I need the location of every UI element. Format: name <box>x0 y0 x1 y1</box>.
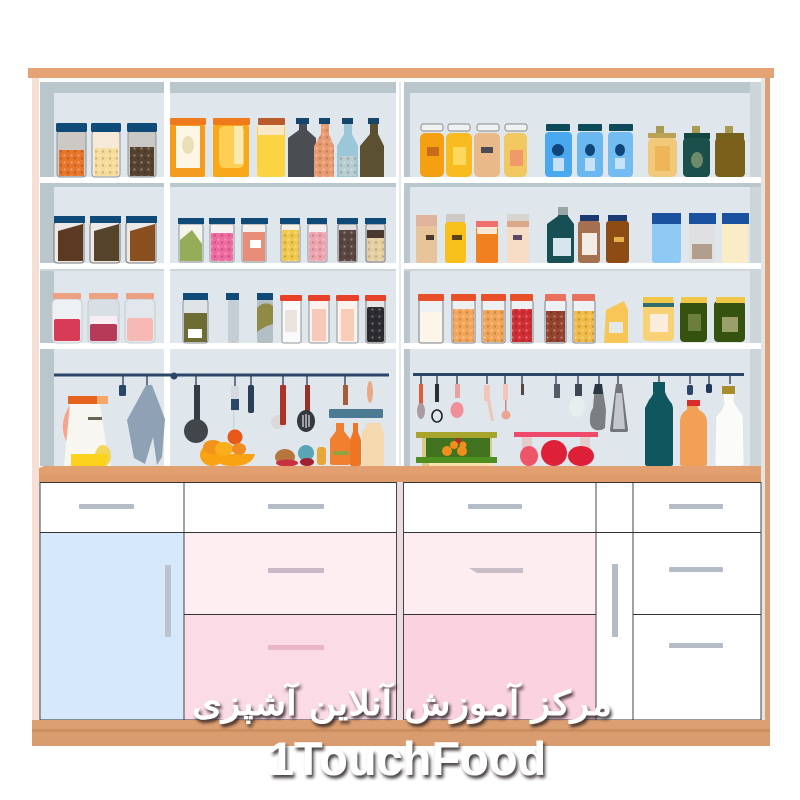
icon: pink whisk <box>450 384 464 418</box>
icon: peach tool <box>484 385 494 421</box>
white bottle <box>715 386 744 466</box>
food pile <box>275 445 326 466</box>
drawer: top centre right <box>404 482 596 532</box>
icon: dark spatula <box>248 385 254 413</box>
jars: shelf 3 left <box>52 293 386 343</box>
right hanging rail with utensils <box>413 373 744 432</box>
jars: shelf 2 left <box>54 216 386 263</box>
oranges <box>200 430 255 466</box>
jug <box>63 396 111 467</box>
cabinet frame <box>32 76 770 727</box>
jars: shelf 3 right <box>418 294 745 343</box>
title: brand: 1TouchFood <box>268 732 546 785</box>
icon: small spoon <box>417 384 425 419</box>
icon: peach spoon <box>502 384 510 420</box>
orange bottle <box>680 400 707 466</box>
base plinth <box>32 720 770 746</box>
title: Persian: مرکز آموزش آنلاین آشپزی <box>192 683 612 724</box>
jars: shelf 2 right <box>416 207 749 263</box>
panel: upper left compartment <box>40 82 164 466</box>
icon: wide spatula <box>610 384 628 432</box>
icon: ladle <box>184 385 208 443</box>
icon: spatula grey <box>590 384 606 430</box>
drawer: top left <box>40 482 184 532</box>
top board <box>28 68 774 78</box>
panel: upper right compartment <box>404 82 761 466</box>
jars: shelf 1 right <box>420 124 745 177</box>
countertop <box>39 466 761 482</box>
panel: upper middle compartment <box>170 82 396 466</box>
icon: skimmer <box>297 385 315 432</box>
icon: cleaver <box>554 384 560 398</box>
jars: shelf 1 left <box>56 118 384 177</box>
icon: red spoon <box>271 385 286 429</box>
small shelf with bottles <box>329 409 384 466</box>
icon: hanging towel <box>127 385 165 465</box>
icon: whisk <box>231 386 239 431</box>
icon: pot holder <box>119 385 126 396</box>
drawer: top middle <box>184 482 396 532</box>
icon: small utensil <box>343 385 348 405</box>
red tray with apples <box>514 432 598 466</box>
door: blue <box>40 532 184 720</box>
icon: round ladle <box>432 384 442 422</box>
drawer: light pink left <box>184 532 396 614</box>
teal bottle <box>645 382 673 466</box>
drawers: right stack <box>633 482 761 720</box>
icon: cleaver 2 <box>569 384 585 417</box>
drawer: pink left <box>184 614 396 720</box>
drawer: light pink right <box>404 532 596 614</box>
shelves <box>40 82 761 466</box>
left hanging rail with utensils <box>54 372 389 465</box>
green tray with oranges <box>416 432 497 469</box>
door: white narrow <box>596 482 633 720</box>
drawer: pink right <box>404 614 596 720</box>
